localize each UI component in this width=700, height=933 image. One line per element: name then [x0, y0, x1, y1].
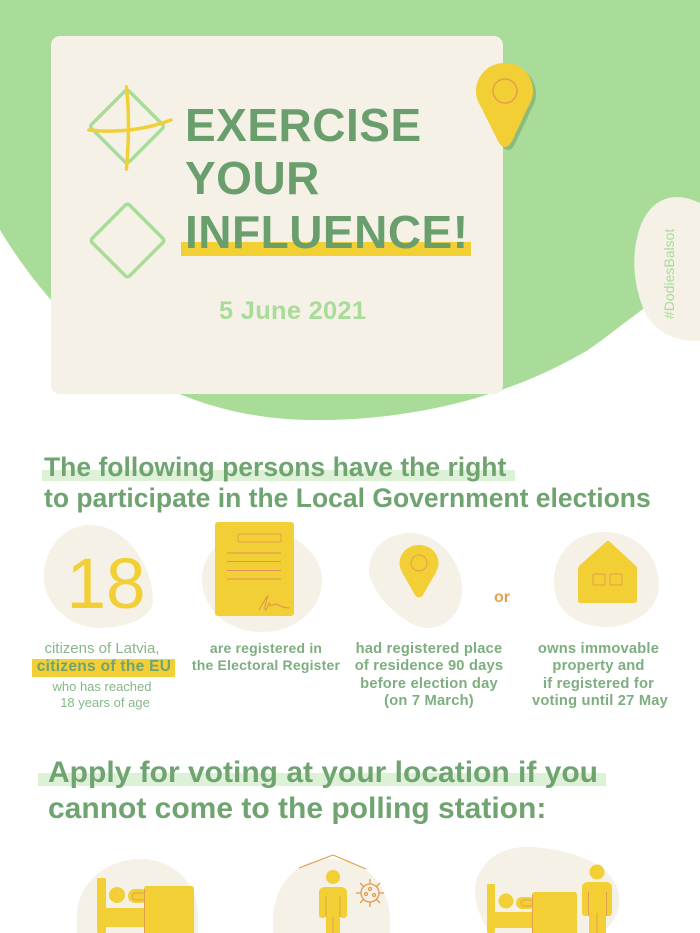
panel: place of residence: (on 7 March) [384, 693, 474, 709]
heading: apply for voting at your location: cannot come to the polling station: [48, 792, 546, 825]
panel: place of residence: before election day [360, 676, 498, 692]
icon: empty ballot diamond [90, 203, 165, 278]
panel: age 18: 18 [67, 545, 145, 624]
panel: person at home with virus [273, 855, 390, 933]
panel: immovable property: if registered for [543, 676, 654, 692]
heading: right to participate [42, 452, 651, 513]
hashtag tag: #DodiesBalsot [661, 229, 677, 319]
icon: person standing [582, 864, 612, 933]
icon: person [319, 870, 347, 933]
panel: place of residence [355, 533, 503, 709]
panel: person in bed [77, 859, 198, 933]
panel: carer with person in bed [475, 847, 619, 933]
panel: age 18 [32, 525, 175, 710]
title: EXERCISE [185, 99, 422, 151]
icon: virus [356, 879, 384, 907]
panel: age 18: citizens of Latvia, [44, 640, 160, 657]
hashtag tag [634, 197, 700, 341]
title [185, 99, 469, 258]
heading: right to participate: The following persons have the right [44, 452, 506, 482]
panel: place of residence: of residence 90 days [355, 658, 503, 674]
icon: roof [299, 855, 366, 869]
panel: electoral register [192, 522, 341, 673]
panel: age 18: 18 years of age [60, 695, 150, 710]
title: YOUR [185, 152, 320, 204]
or label: or [494, 589, 510, 606]
panel: age 18: citizens of the EU [37, 658, 171, 675]
icon: small pin [400, 545, 438, 597]
icon: house [578, 541, 637, 603]
panel: place of residence: had registered place [356, 641, 502, 657]
icon: map pin [476, 63, 536, 150]
panel: immovable property: voting until 27 May [532, 693, 669, 709]
panel: immovable property [532, 532, 669, 709]
panel: immovable property: owns immovable [538, 641, 659, 657]
heading: right to participate: to participate in the Local Government elections [44, 483, 651, 513]
heading: apply for voting at your location: Apply for voting at your location if you [48, 756, 598, 789]
title underline [181, 242, 471, 256]
green background shape [0, 0, 700, 420]
panel: age 18: who has reached [51, 679, 152, 694]
icon: bed with patient [487, 884, 577, 933]
date: 5 June 2021 [219, 297, 366, 325]
panel: electoral register: are registered in [210, 640, 322, 656]
title: INFLUENCE! [185, 206, 469, 258]
icon: bed with patient [97, 878, 194, 933]
title card [51, 36, 503, 394]
panel: electoral register: the Electoral Register [192, 657, 341, 673]
icon: document [215, 522, 294, 616]
panel: immovable property: property and [552, 658, 645, 674]
heading: apply for voting at your location [38, 756, 606, 825]
icon: ballot diamond with cross [89, 87, 171, 169]
